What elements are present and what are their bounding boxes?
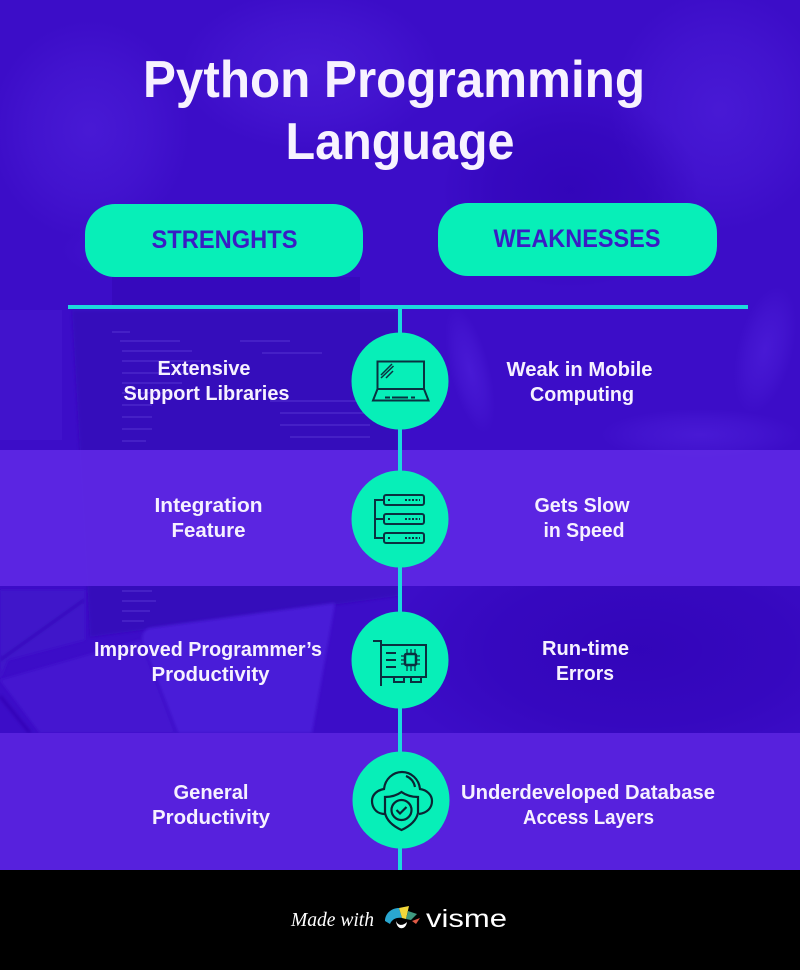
horizontal divider line <box>68 305 748 309</box>
weakness 4: Access Layers <box>523 807 654 829</box>
weakness 1: Computing <box>530 384 634 406</box>
icon: cloud shield <box>352 752 450 848</box>
icon: circuit card <box>352 612 448 708</box>
weakness 2 <box>534 495 630 542</box>
band: row 4 <box>0 733 800 870</box>
strength 2: Integration <box>154 495 262 517</box>
icon: laptop <box>352 332 448 430</box>
strength 4: General <box>174 782 248 804</box>
vertical timeline line <box>398 305 402 870</box>
header pill: weaknesses: WEAKNESSES <box>494 225 660 253</box>
strength 4 <box>152 782 271 829</box>
weaknesses labels <box>461 359 715 829</box>
title <box>143 51 645 171</box>
band: row 2 <box>0 450 800 586</box>
weakness 3: Run-time <box>542 638 629 660</box>
weakness 4: Underdeveloped Database <box>461 782 715 804</box>
weakness 1: Weak in Mobile <box>506 359 652 381</box>
weakness 2: in Speed <box>544 520 624 542</box>
weakness 2: Gets Slow <box>534 495 630 517</box>
made with text: Made with <box>290 909 374 931</box>
strength 1: Support Libraries <box>124 383 290 405</box>
footer bar <box>0 870 800 970</box>
header pill: weaknesses <box>438 203 717 276</box>
strength 2 <box>154 495 262 542</box>
strength 3 <box>94 639 322 686</box>
visme logo mark <box>385 906 420 928</box>
laptop and desk shapes <box>0 590 335 733</box>
title: Python Programming <box>143 51 645 109</box>
title: Language <box>286 113 514 171</box>
strengths labels <box>94 358 322 829</box>
strength 3: Productivity <box>152 664 270 686</box>
strength 1 <box>124 358 290 405</box>
weakness 3 <box>542 638 629 685</box>
weakness 1 <box>506 359 652 406</box>
strength 3: Improved Programmer’s <box>94 639 322 661</box>
header pill: strengths: STRENGHTS <box>152 226 298 254</box>
header pill: strengths <box>85 204 363 277</box>
weakness 3: Errors <box>556 663 614 685</box>
strength 4: Productivity <box>152 807 271 829</box>
visme wordmark: visme <box>426 905 507 933</box>
strength 2: Feature <box>172 520 246 542</box>
icon: server tree <box>352 470 448 568</box>
monitor silhouette <box>112 277 360 305</box>
code lines on monitor <box>112 331 390 622</box>
weakness 4 <box>461 782 715 829</box>
strength 1: Extensive <box>158 358 250 380</box>
